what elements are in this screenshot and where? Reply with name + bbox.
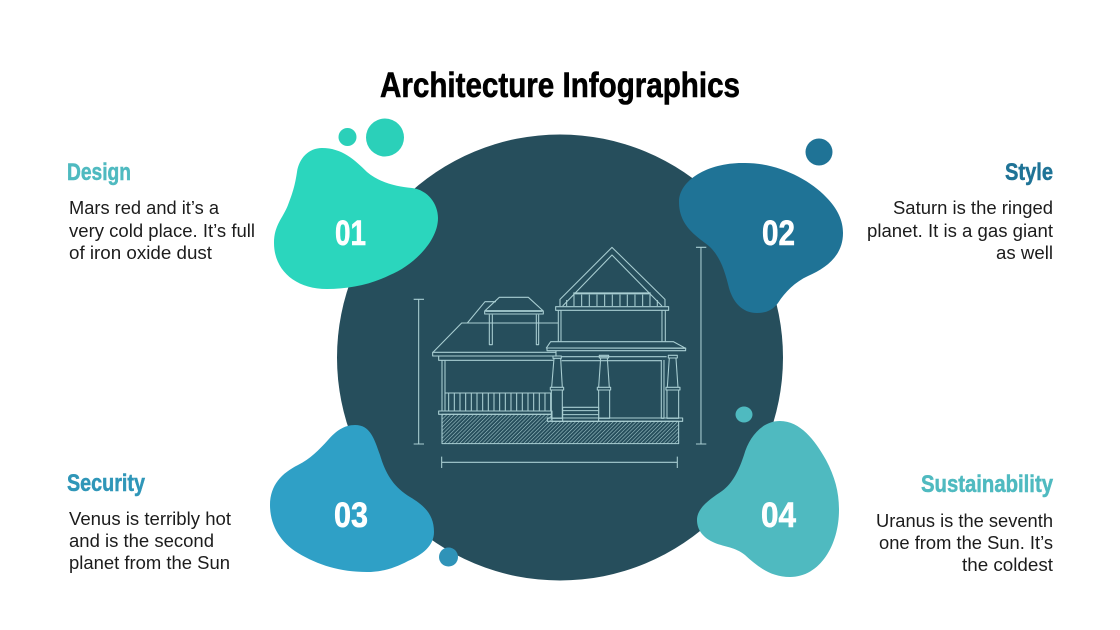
body: sustainability: one from the Sun. It’s xyxy=(879,533,1053,553)
porch deck and steps xyxy=(439,407,683,421)
body: design: of iron oxide dust xyxy=(69,243,212,263)
body: security xyxy=(69,509,231,573)
heading: design: Design xyxy=(67,159,131,186)
text block: security xyxy=(67,470,231,573)
heading: style: Style xyxy=(1005,159,1053,186)
hatched foundation xyxy=(442,414,679,444)
blob 03 with number xyxy=(270,425,434,572)
body: sustainability: the coldest xyxy=(962,555,1053,575)
body: style: as well xyxy=(996,243,1053,263)
body: security: Venus is terribly hot xyxy=(69,509,231,529)
decorative dot: security xyxy=(439,548,458,566)
body: sustainability: Uranus is the seventh xyxy=(876,511,1053,531)
body: design: very cold place. It’s full xyxy=(69,221,255,241)
heading: security: Security xyxy=(67,470,146,497)
left hip roof and dormer xyxy=(433,297,558,411)
number 04: 04 xyxy=(761,496,796,535)
body: style xyxy=(867,198,1053,263)
body: style: Saturn is the ringed xyxy=(893,198,1053,218)
decorative dot: style xyxy=(806,138,832,166)
title: Architecture Infographics xyxy=(380,66,740,105)
body: style: planet. It is a gas giant xyxy=(867,221,1053,241)
text block: sustainability xyxy=(876,471,1054,575)
body: design xyxy=(69,198,255,263)
number 03: 03 xyxy=(334,496,368,535)
railing xyxy=(445,393,551,411)
blob 01 with number xyxy=(274,148,438,289)
dimension line: left height xyxy=(414,299,424,444)
body: security: planet from the Sun xyxy=(69,553,230,573)
central dark circle xyxy=(337,134,783,580)
body: sustainability xyxy=(876,511,1053,575)
number 02: 02 xyxy=(762,214,795,253)
house blueprint illustration xyxy=(414,247,706,468)
text block: style xyxy=(867,159,1053,263)
dimension line: right height xyxy=(696,247,706,444)
dimension line: bottom width xyxy=(442,457,677,468)
blob 02 with number xyxy=(679,163,843,313)
decorative dot: sustainability xyxy=(736,406,752,422)
decorative dots: design xyxy=(338,118,404,156)
body: security: and is the second xyxy=(69,531,214,551)
porch roof xyxy=(546,342,686,361)
text block: design xyxy=(67,159,255,263)
porch columns xyxy=(550,355,680,418)
upper gable roof xyxy=(556,247,669,341)
heading: sustainability: Sustainability xyxy=(921,471,1054,498)
body: design: Mars red and it’s a xyxy=(69,198,220,218)
number 01: 01 xyxy=(335,214,366,253)
blob 04 with number xyxy=(697,421,839,577)
